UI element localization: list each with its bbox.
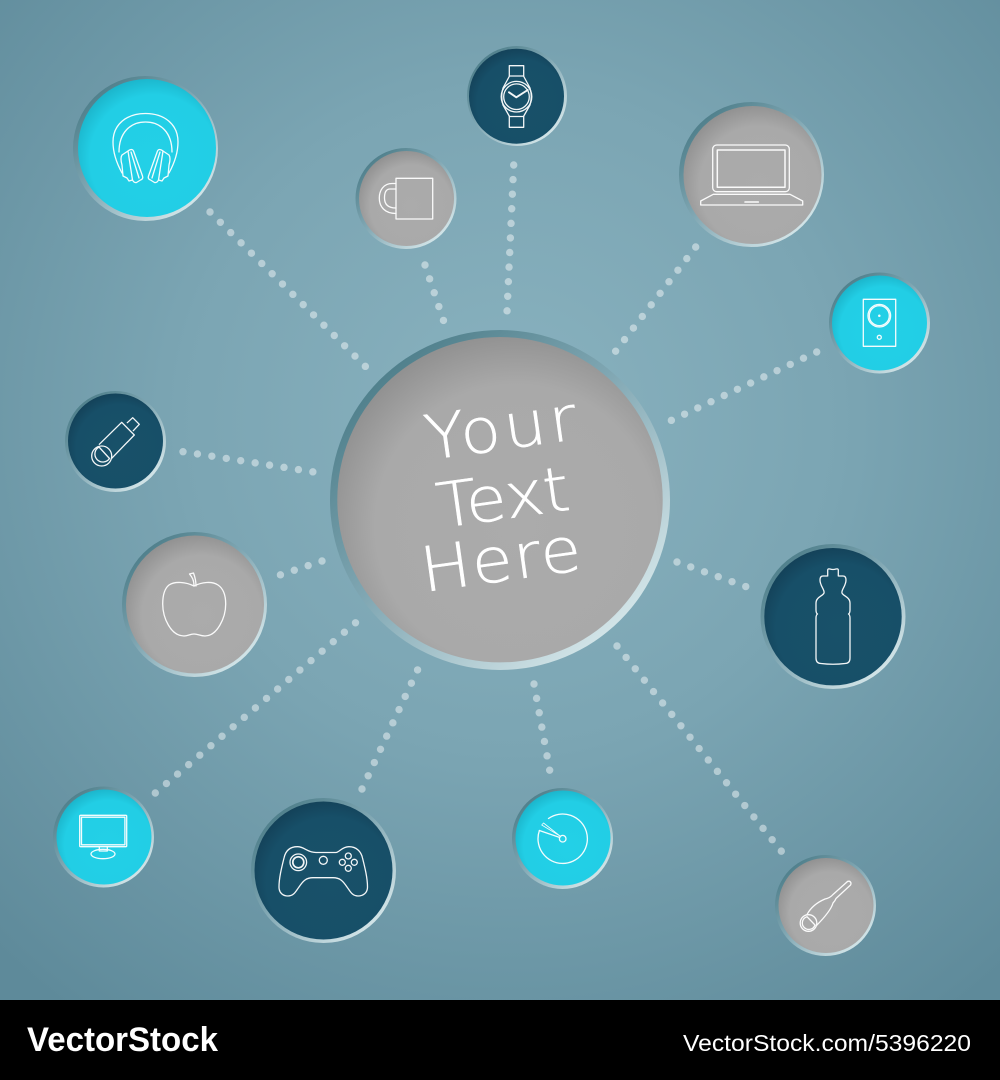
bubble: radar [512, 788, 613, 889]
icon: apple [163, 573, 226, 636]
connector: watch [507, 165, 514, 312]
bubble: screwdriver [775, 855, 876, 956]
bubble: gamepad [251, 798, 396, 943]
bubble: speaker [829, 272, 930, 374]
icon: usb drive [92, 418, 139, 466]
icon: mug [379, 178, 433, 219]
icon: headphones [113, 114, 178, 183]
connector: laptop [615, 247, 696, 352]
bubble: mug [356, 148, 456, 249]
icon: laptop [701, 145, 803, 205]
bubble: apple [122, 532, 267, 677]
connector: screwdriver [617, 646, 782, 852]
connector: headphones [210, 212, 367, 368]
connector: monitor [155, 622, 357, 793]
connector: mug [425, 265, 444, 322]
connector: apple [280, 561, 322, 575]
connector: radar [534, 684, 550, 772]
bubble: bottle [760, 544, 906, 689]
bubble: headphones [73, 76, 218, 221]
icon: bottle [816, 569, 850, 664]
bubble: watch [467, 46, 567, 146]
bubble: usb drive [65, 391, 166, 492]
dotted connectors [155, 165, 817, 852]
icon: monitor [80, 815, 127, 859]
connector: bottle [677, 562, 747, 587]
central text: Here [416, 513, 587, 607]
bubble: monitor [53, 786, 154, 888]
bubble: laptop [679, 102, 824, 247]
central circle [330, 330, 670, 670]
icon: watch [501, 66, 532, 127]
connector: speaker [670, 352, 817, 421]
icon: radar [538, 814, 587, 863]
connector: usb drive [183, 452, 314, 472]
central text: Your [420, 382, 585, 475]
icon: gamepad [279, 847, 368, 896]
footer logo: VectorStock [27, 1021, 218, 1059]
footer bar [0, 1000, 1000, 1080]
central text: Text [432, 453, 574, 543]
icon: screwdriver [800, 881, 851, 931]
connector: gamepad [362, 669, 418, 789]
icon: speaker [863, 299, 896, 346]
central text [416, 382, 587, 607]
footer image id: VectorStock.com/5396220 [683, 1030, 971, 1056]
